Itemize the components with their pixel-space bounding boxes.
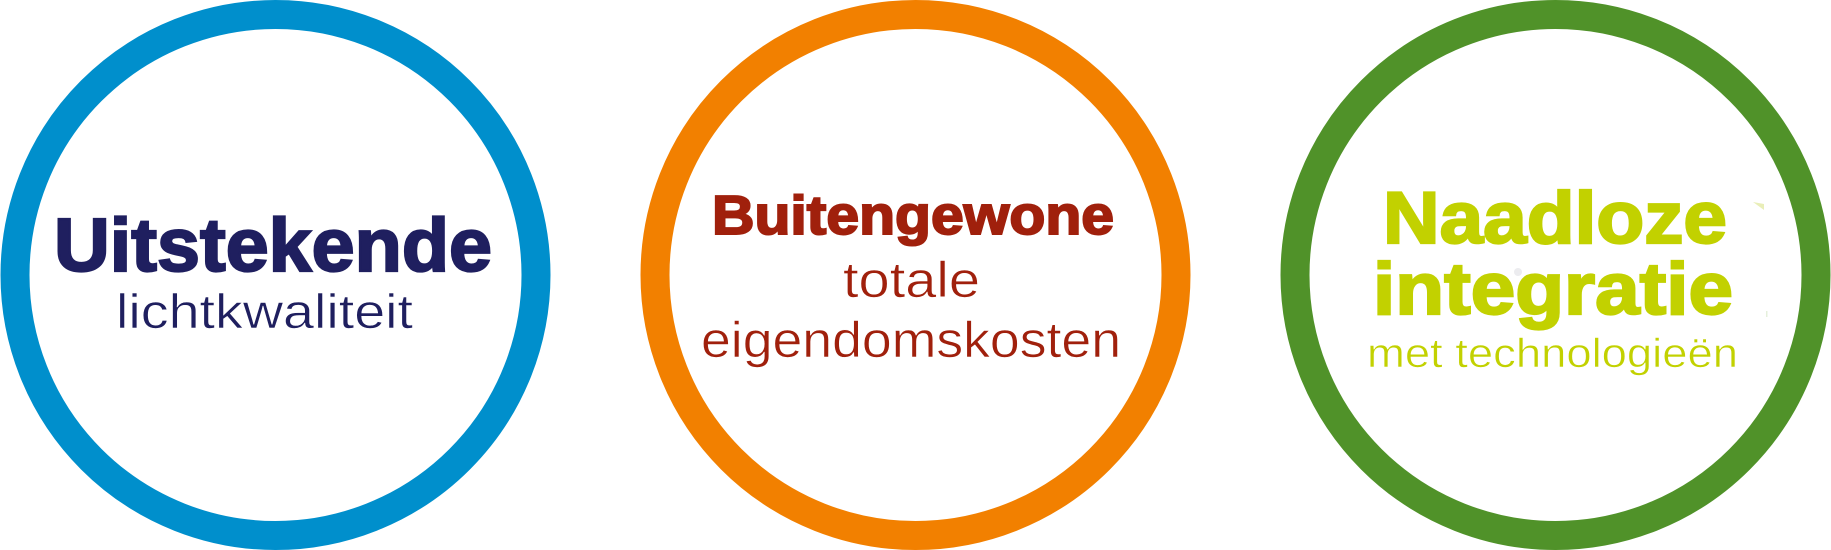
text: lichtkwaliteit: lichtkwaliteit	[116, 286, 413, 339]
heading: Uitstekende: Uitstekende	[54, 203, 492, 287]
orange ring	[655, 14, 1176, 536]
panel: seamless integration circle	[1295, 14, 1816, 536]
text: met technologieën: met technologieën	[1367, 330, 1738, 376]
text: totale: totale	[843, 252, 980, 308]
panel: total cost of ownership circle	[655, 14, 1176, 536]
panel: light quality circle	[15, 14, 536, 536]
heading: Buitengewone: Buitengewone	[712, 184, 1114, 246]
text: eigendomskosten: eigendomskosten	[701, 312, 1121, 368]
green ring	[1295, 14, 1816, 536]
heading: integratie: integratie	[1373, 249, 1733, 330]
heading: Naadloze: Naadloze	[1383, 178, 1727, 259]
blue ring	[15, 14, 536, 536]
